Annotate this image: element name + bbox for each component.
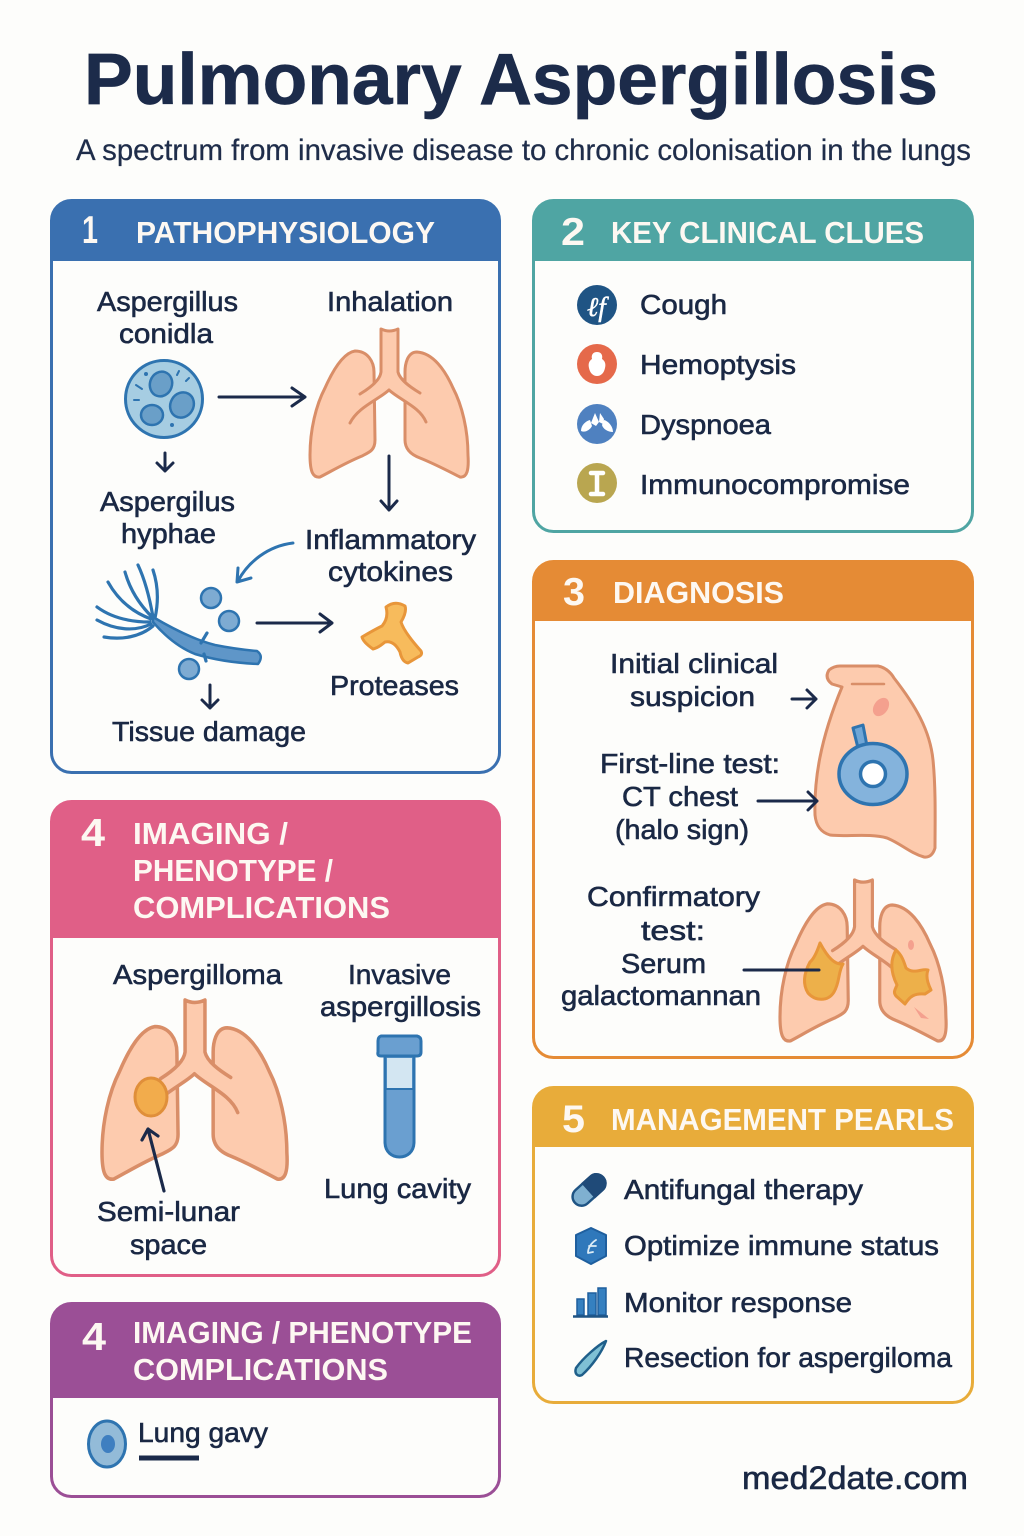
label: confirmatory test [561, 881, 761, 1011]
panel header: MANAGEMENT PEARLS [611, 1102, 954, 1137]
panel header: 3 [563, 571, 585, 614]
panel header: 2 [561, 211, 585, 254]
label: semi-lunar space: Semi-lunar [97, 1196, 240, 1227]
arrow: hyphae to proteases [257, 614, 332, 632]
label: first-line test: (halo sign) [615, 814, 749, 845]
icon: single lung with halo sign [815, 666, 935, 857]
panel header: 5 [562, 1098, 585, 1141]
label: invasive aspergillosis [320, 959, 481, 1022]
panel header: IMAGING / PHENOTYPE [133, 1315, 472, 1350]
clue: hemoptysis [577, 344, 796, 384]
arrow: conidia to hyphae [157, 453, 173, 471]
panel header: PATHOPHYSIOLOGY [136, 215, 435, 250]
icon: lungs with consolidation [780, 880, 946, 1041]
label: semi-lunar space [97, 1196, 240, 1260]
label: Aspergilus hyphae [100, 486, 235, 549]
label: confirmatory test: galactomannan [561, 980, 761, 1011]
label: confirmatory test: Confirmatory [587, 881, 760, 912]
pearl: antifungal therapy: Antifungal therapy [624, 1174, 863, 1205]
panel header: 4 [82, 1316, 106, 1359]
panel header: DIAGNOSIS [613, 575, 784, 610]
panel: key clinical clues [534, 200, 972, 532]
label: Aspergilus hyphae: hyphae [121, 518, 216, 549]
panel frame [534, 562, 972, 1058]
label: initial clinical suspicion: suspicion [630, 681, 755, 712]
label: proteases: Proteases [330, 670, 459, 701]
panel header [52, 802, 500, 938]
panel frame [52, 802, 500, 1276]
panel header [534, 1088, 972, 1147]
label: lung gavy: Lung gavy [138, 1417, 268, 1448]
label: Aspergillus conidia: conidla [119, 318, 213, 349]
label: first-line test [600, 748, 780, 845]
label: invasive aspergillosis: Invasive [348, 959, 451, 990]
label: Aspergillus conidia [97, 286, 238, 349]
clue: dyspnoea: Dyspnoea [640, 409, 771, 440]
label: inhalation: Inhalation [327, 286, 453, 317]
panel: imaging phenotype complications (second) [52, 1304, 500, 1496]
arrow: CT chest to lung [758, 792, 817, 810]
label: inflammatory cytokines [305, 524, 476, 587]
clue: cough [577, 285, 727, 325]
panel header: IMAGING / [133, 816, 288, 851]
icon: conidium cell [126, 360, 202, 438]
label: aspergilloma: Aspergilloma [113, 959, 282, 990]
label: confirmatory test: Serum [621, 948, 706, 979]
panel header [52, 1304, 500, 1398]
panel: pathophysiology [52, 200, 500, 772]
icon: hyphae with spores [97, 565, 261, 679]
pearl: monitor response: Monitor response [624, 1287, 852, 1318]
label: inflammatory cytokines: cytokines [328, 556, 453, 587]
panel header [52, 200, 500, 261]
label: Aspergilus hyphae: Aspergilus [100, 486, 235, 517]
label: confirmatory test: test: [641, 915, 705, 946]
label: first-line test: First-line test: [600, 748, 780, 779]
panel header: COMPLICATIONS [133, 1352, 388, 1387]
arrow: suspicion to lung [792, 690, 816, 708]
pearl: optimize immune status: Optimize immune status [624, 1230, 939, 1261]
clue: dyspnoea [577, 404, 771, 444]
label: semi-lunar space: space [130, 1229, 207, 1260]
panel frame [52, 1304, 500, 1496]
panel frame [534, 1088, 972, 1402]
arrow: conidia to lungs [219, 388, 305, 406]
label: initial clinical suspicion: Initial clinical [610, 648, 778, 679]
pearl: antifungal therapy [569, 1171, 863, 1209]
panel frame [534, 200, 972, 532]
icon: lung cavity [88, 1421, 126, 1467]
label: Aspergillus conidia: Aspergillus [97, 286, 238, 317]
label: initial clinical suspicion [610, 648, 778, 712]
clue: immunocompromise: Immunocompromise [640, 469, 910, 500]
panel: imaging phenotype complications [52, 802, 500, 1276]
label: first-line test: CT chest [622, 781, 738, 812]
clue: hemoptysis: Hemoptysis [640, 349, 796, 380]
panel header: KEY CLINICAL CLUES [611, 215, 924, 250]
panel header: PHENOTYPE / [133, 853, 333, 888]
subtitle: A spectrum from invasive disease to chronic colonisation in the lungs [76, 134, 971, 167]
icon: lungs [310, 329, 468, 477]
panel header: 4 [81, 812, 105, 855]
arrow: semi-lunar space [142, 1129, 164, 1191]
arrow: cytokines to hyphae [237, 543, 293, 582]
icon: test tube [378, 1036, 421, 1157]
clue: immunocompromise [577, 463, 910, 503]
panel header: 1 [82, 209, 98, 252]
clue: cough: Cough [640, 289, 727, 320]
panel: management pearls [534, 1088, 972, 1402]
footer: source: med2date.com [742, 1460, 968, 1496]
label: invasive aspergillosis: aspergillosis [320, 991, 481, 1022]
label: lung cavity: Lung cavity [324, 1173, 471, 1204]
label: inflammatory cytokines: Inflammatory [305, 524, 476, 555]
panel frame [52, 200, 500, 772]
panel header [534, 200, 972, 261]
clue: cough: ℓf [587, 292, 609, 322]
panel: diagnosis [534, 562, 972, 1058]
arrow: lungs to cytokines [381, 456, 397, 510]
line: galactomannan pointer [744, 968, 819, 972]
panel header [534, 562, 972, 621]
icon: protease [362, 603, 422, 663]
label: tissue damage: Tissue damage [112, 716, 306, 747]
panel header: COMPLICATIONS [133, 890, 390, 925]
icon: lungs with aspergilloma [102, 1000, 287, 1179]
pearl: resection for aspergilloma: Resection for aspergiloma [624, 1342, 952, 1373]
title: Pulmonary Aspergillosis [84, 40, 938, 120]
arrow: hyphae to tissue damage [202, 685, 218, 708]
